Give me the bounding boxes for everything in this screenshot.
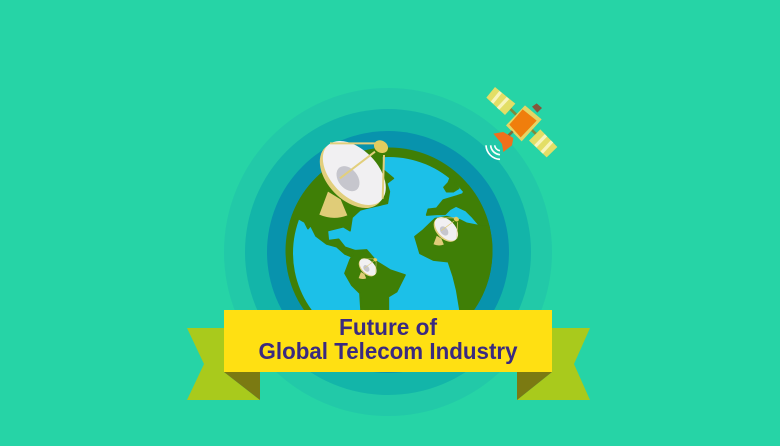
- icon: medium satellite dish: [429, 213, 463, 246]
- satellite nozzle: [493, 132, 513, 152]
- land: Scandinavia: [444, 177, 459, 192]
- title: [258, 314, 518, 364]
- ribbon: right tail: [517, 328, 590, 400]
- icon: signal waves: [486, 145, 500, 159]
- land: North America: [290, 148, 394, 258]
- infographic canvas: [187, 87, 590, 416]
- land: Europe and Asia: [426, 184, 490, 228]
- solar panel: upper: [486, 87, 515, 115]
- satellite body: [506, 105, 542, 141]
- concentric rings: [224, 88, 552, 416]
- icon: small satellite dish: [355, 255, 380, 280]
- solar panel: lower: [529, 129, 557, 157]
- title: Global Telecom Industry: [258, 338, 518, 364]
- title: Future of: [339, 314, 437, 340]
- banner: [224, 310, 552, 372]
- land: Africa: [414, 216, 492, 310]
- icon: large satellite dish: [307, 129, 398, 220]
- land: South America: [345, 250, 405, 320]
- globe: [286, 148, 492, 310]
- icon: satellite: [486, 87, 557, 159]
- ribbon: left tail: [187, 328, 260, 400]
